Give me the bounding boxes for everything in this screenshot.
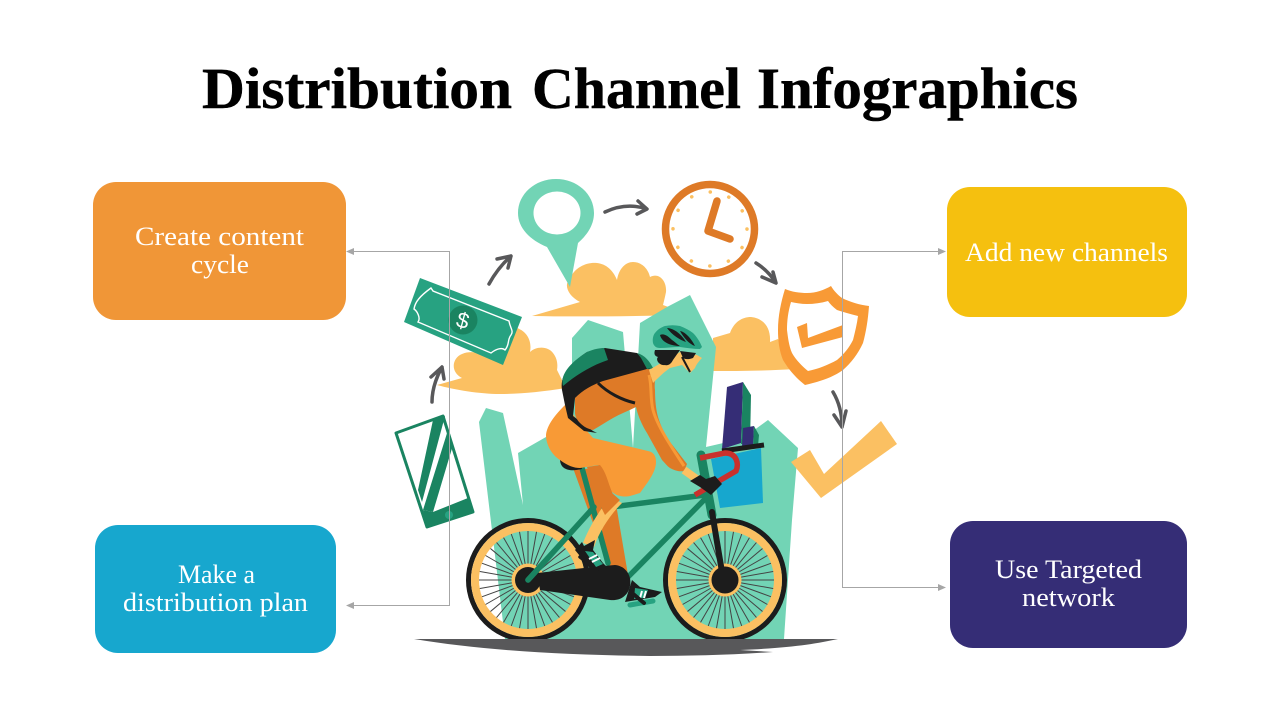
- saddle: [560, 459, 582, 470]
- green mountains: [479, 295, 798, 639]
- arrow: phone to banknote: [431, 367, 444, 402]
- panel: add new channels: Add new channels: [965, 238, 1168, 267]
- panel: add new channels: [947, 187, 1187, 317]
- far leg: [573, 468, 628, 575]
- cloud: left: [437, 328, 566, 394]
- illustration: cyclist scene: [396, 179, 897, 656]
- near lower leg: [583, 497, 622, 547]
- icon: smartphone: [396, 416, 474, 528]
- cloud: right: [713, 317, 795, 371]
- icon: location pin: [518, 179, 594, 287]
- glove: [690, 475, 722, 495]
- hip and thigh: [546, 405, 656, 497]
- panel: create content cycle: [93, 182, 346, 320]
- icon: shield with check: [778, 286, 869, 385]
- icon: banknote: $: [454, 307, 472, 334]
- inner thigh shade: [587, 465, 620, 515]
- arrow: pin to clock: [605, 201, 647, 214]
- panel: use targeted network: [950, 521, 1187, 648]
- connector: right bracket: [842, 248, 946, 591]
- icon: large check mark: [791, 421, 897, 498]
- forearm: [684, 470, 698, 480]
- torso and arm: [575, 369, 687, 471]
- panel: make a distribution plan: [95, 525, 336, 653]
- basket with bars: [711, 382, 764, 508]
- icon: clock: [666, 184, 754, 274]
- icon: banknote: [404, 278, 522, 365]
- panel: make a distribution plan: Make a: [178, 560, 255, 589]
- panel: use targeted network: Use Targeted: [995, 555, 1142, 584]
- title: Channel: [532, 56, 741, 121]
- handlebar: [695, 453, 737, 495]
- title: Distribution: [202, 56, 512, 121]
- rear wheel: [468, 520, 588, 640]
- arrow: banknote to pin: [489, 256, 511, 284]
- bike frame: [528, 455, 712, 580]
- title: Infographics: [757, 56, 1078, 121]
- panel: create content cycle: Create content: [135, 222, 305, 251]
- backpack: [562, 348, 653, 433]
- panel: use targeted network: network: [1022, 583, 1115, 612]
- cloud: top: [532, 262, 690, 316]
- front shoe: [625, 580, 662, 605]
- connector: left bracket: [346, 248, 450, 609]
- title: [202, 56, 1078, 121]
- head with helmet: [649, 325, 702, 383]
- front wheel: [666, 520, 784, 640]
- arrow: clock to shield: [756, 263, 776, 283]
- rear stay over hub: [528, 558, 548, 580]
- chain guard and fork: [537, 512, 722, 600]
- arrow: shield to check: [833, 392, 846, 427]
- rear shoe: [575, 540, 608, 572]
- ground shadow: [414, 639, 838, 656]
- panel: create content cycle: cycle: [191, 250, 249, 279]
- panel: make a distribution plan: distribution plan: [123, 588, 308, 617]
